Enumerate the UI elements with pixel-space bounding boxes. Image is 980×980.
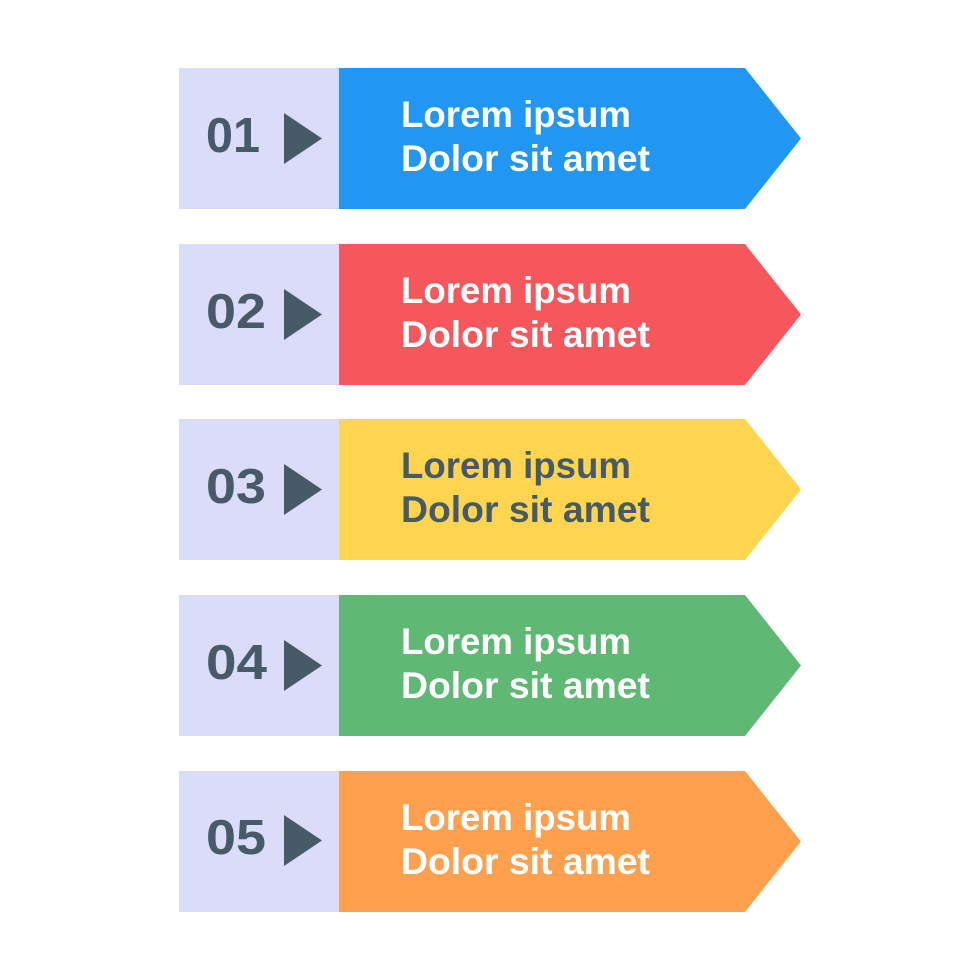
arrow banner 05 bbox=[339, 771, 801, 912]
arrow banner 03 bbox=[339, 419, 801, 560]
icon: triangle 03 bbox=[284, 464, 322, 515]
number 05: 05 bbox=[206, 811, 266, 865]
arrow banner 02 bbox=[339, 244, 801, 385]
number panel 04 bbox=[179, 595, 340, 736]
label 01: Dolor sit amet bbox=[401, 138, 650, 179]
number panel 02 bbox=[179, 244, 340, 385]
number 03: 03 bbox=[206, 460, 266, 514]
label 02: Dolor sit amet bbox=[401, 314, 650, 355]
row 04 bbox=[179, 595, 801, 736]
icon: triangle 05 bbox=[284, 815, 322, 866]
label 02: Lorem ipsum bbox=[401, 270, 631, 311]
arrow banner 01 bbox=[339, 68, 801, 209]
number panel 01 bbox=[179, 68, 340, 209]
icon: triangle 04 bbox=[284, 640, 322, 691]
arrow banner 04 bbox=[339, 595, 801, 736]
row 03 bbox=[179, 419, 801, 560]
label 05: Lorem ipsum bbox=[401, 797, 631, 838]
number 01: 01 bbox=[206, 109, 260, 163]
label 01: Lorem ipsum bbox=[401, 94, 631, 135]
number panel 05 bbox=[179, 771, 340, 912]
label 05: Dolor sit amet bbox=[401, 841, 650, 882]
label 03: Dolor sit amet bbox=[401, 489, 650, 530]
number 04: 04 bbox=[206, 636, 267, 690]
row 01 bbox=[179, 68, 801, 209]
row 02 bbox=[179, 244, 801, 385]
number panel 03 bbox=[179, 419, 340, 560]
icon: triangle 01 bbox=[284, 113, 322, 164]
number 02: 02 bbox=[206, 285, 266, 339]
row 05 bbox=[179, 771, 801, 912]
label 04: Lorem ipsum bbox=[401, 621, 631, 662]
label 04: Dolor sit amet bbox=[401, 665, 650, 706]
icon: triangle 02 bbox=[284, 289, 322, 340]
label 03: Lorem ipsum bbox=[401, 445, 631, 486]
